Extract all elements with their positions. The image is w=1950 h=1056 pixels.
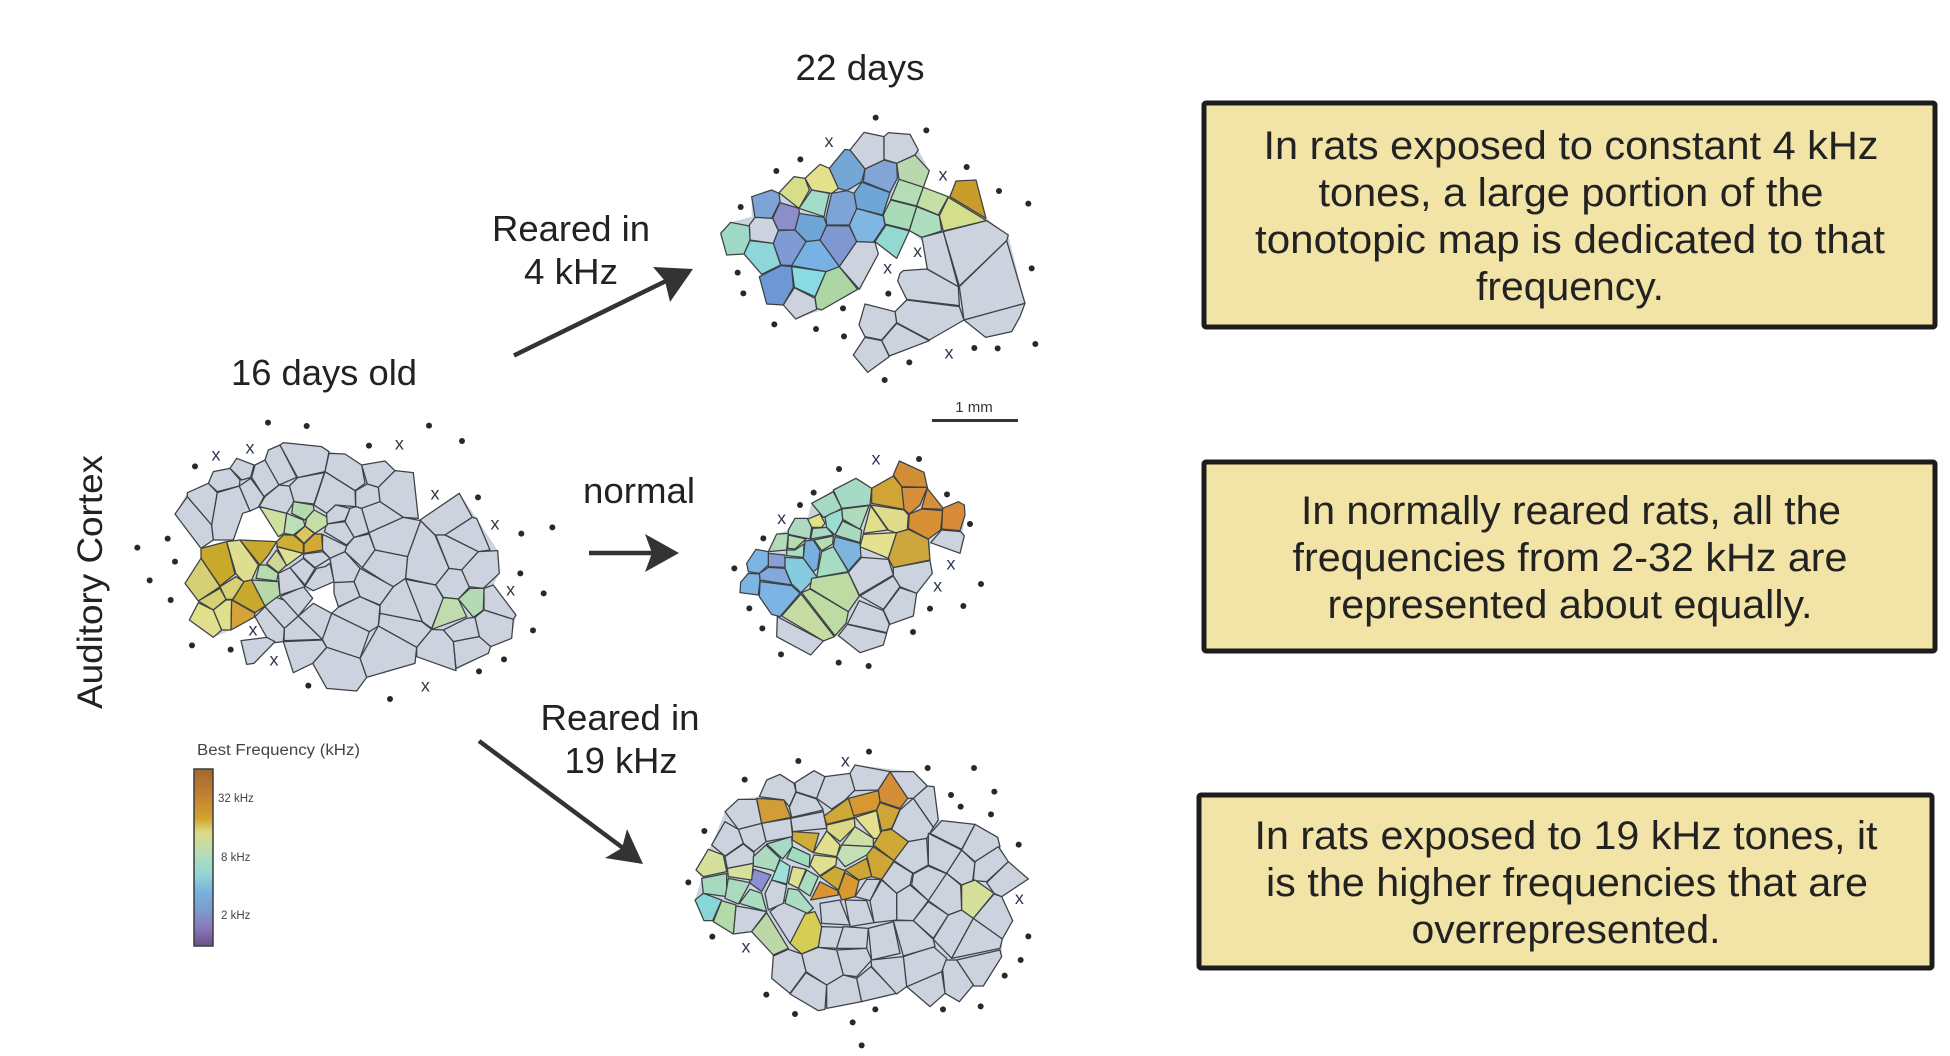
arrow: to 4 kHz map bbox=[514, 267, 693, 356]
label: Reared in 19 kHz bbox=[540, 697, 700, 781]
electrode markers: x bbox=[248, 619, 257, 639]
electrode markers: x bbox=[883, 258, 892, 278]
scale bar: 1 mm: 1 mm bbox=[955, 399, 993, 416]
electrode markers: x bbox=[211, 445, 220, 465]
electrode markers: x bbox=[490, 513, 499, 533]
electrode markers bbox=[735, 115, 1038, 383]
label: Reared in 4 kHz bbox=[492, 208, 650, 292]
label: Reared in 4 kHz: 4 kHz bbox=[524, 251, 618, 292]
legend: best frequency colour bar: 8 kHz bbox=[221, 852, 251, 864]
callout: 19 kHz explanation: is the higher frequencies that are bbox=[1266, 861, 1868, 905]
electrode markers: x bbox=[841, 751, 850, 771]
legend: best frequency colour bar: 2 kHz bbox=[221, 910, 251, 922]
callout: 4 kHz explanation bbox=[1204, 103, 1935, 327]
electrode markers bbox=[731, 449, 984, 669]
label: Reared in 19 kHz: 19 kHz bbox=[564, 740, 678, 781]
label: Reared in 19 kHz: Reared in bbox=[540, 697, 700, 738]
heading: Auditory Cortex: Auditory Cortex bbox=[71, 454, 110, 709]
callout: 19 kHz explanation bbox=[1199, 795, 1932, 968]
electrode markers: x bbox=[946, 553, 955, 573]
electrode markers: x bbox=[944, 342, 953, 362]
electrode markers: x bbox=[430, 483, 439, 503]
legend: best frequency colour bar: 32 kHz bbox=[218, 793, 254, 805]
label: Reared in 4 kHz: Reared in bbox=[492, 208, 650, 249]
label: normal: normal bbox=[583, 470, 695, 511]
scale bar: 1 mm bbox=[932, 399, 1018, 420]
label: 22 days: 22 days bbox=[796, 47, 924, 88]
electrode markers: x bbox=[1015, 888, 1024, 908]
electrode markers: x bbox=[933, 575, 942, 595]
electrode markers: x bbox=[741, 937, 750, 957]
electrode markers: x bbox=[421, 675, 430, 695]
electrode markers: x bbox=[871, 449, 880, 469]
arrow: to 19 kHz map bbox=[479, 741, 643, 864]
callout: 4 kHz explanation: In rats exposed to constant 4 kHz bbox=[1264, 124, 1878, 168]
arrow: to normal map bbox=[589, 534, 679, 572]
map: 16 days old bbox=[134, 420, 555, 702]
map: reared in 4 kHz, 22 days bbox=[721, 115, 1038, 383]
callout: normal rearing explanation: frequencies from 2-32 kHz are bbox=[1292, 536, 1848, 580]
label: 16 days old: 16 days old bbox=[231, 352, 417, 393]
callout: 19 kHz explanation: overrepresented. bbox=[1412, 908, 1720, 952]
legend: best frequency colour bar bbox=[194, 742, 360, 946]
map: normal rearing bbox=[731, 449, 984, 669]
map: reared in 19 kHz bbox=[685, 749, 1031, 1048]
callout: 4 kHz explanation: tones, a large portion of the bbox=[1318, 171, 1824, 215]
electrode markers: x bbox=[395, 434, 404, 454]
electrode markers: x bbox=[506, 580, 515, 600]
electrode markers: x bbox=[777, 508, 786, 528]
callout: 19 kHz explanation: In rats exposed to 19 kHz tones, it bbox=[1254, 814, 1878, 858]
electrode markers: x bbox=[269, 649, 278, 669]
electrode markers: x bbox=[913, 241, 922, 261]
electrode markers bbox=[685, 749, 1031, 1048]
callout: normal rearing explanation bbox=[1204, 462, 1935, 651]
electrode markers bbox=[134, 420, 555, 702]
electrode markers: x bbox=[245, 437, 254, 457]
electrode markers: x bbox=[938, 165, 947, 185]
legend: best frequency colour bar: Best Frequency (kHz) bbox=[197, 742, 360, 759]
callout: 4 kHz explanation: frequency. bbox=[1476, 265, 1664, 309]
callout: normal rearing explanation: In normally reared rats, all the bbox=[1301, 489, 1841, 533]
electrode markers: x bbox=[824, 131, 833, 151]
callout: normal rearing explanation: represented about equally. bbox=[1328, 583, 1812, 627]
callout: 4 kHz explanation: tonotopic map is dedicated to that bbox=[1255, 218, 1885, 262]
